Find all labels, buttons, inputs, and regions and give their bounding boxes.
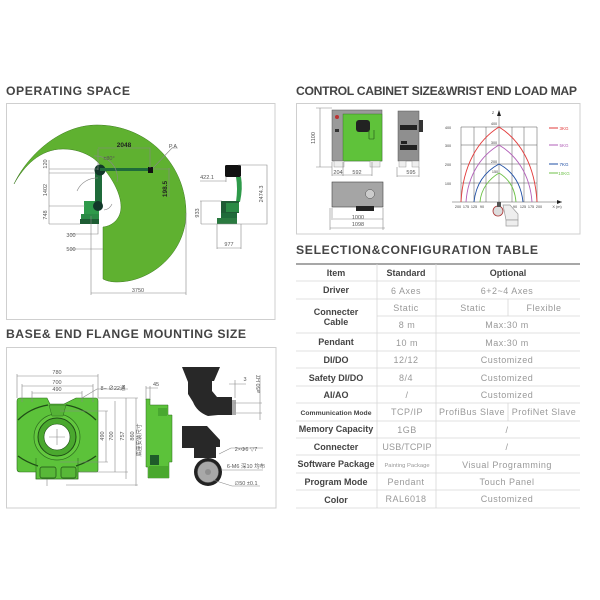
table header: Item <box>327 268 345 278</box>
row: pendant: Max:30 m <box>485 338 529 348</box>
chart axis labels: 150 <box>492 170 498 174</box>
row: program mode <box>304 477 535 487</box>
row: color: RAL6018 <box>385 494 427 504</box>
dimension lines: front view: 977 <box>224 242 234 248</box>
dimension lines: side view: 748 <box>43 210 49 220</box>
icon: wrist side view: 3 <box>243 377 247 383</box>
dimension lines: side view: 300 <box>66 233 76 239</box>
chart axis labels: 90 <box>480 205 484 209</box>
table: selection and configuration <box>296 264 580 508</box>
row: driver <box>323 285 533 296</box>
row: memory capacity: Memory Capacity <box>299 424 373 434</box>
chart axis labels: X (m) <box>552 205 562 209</box>
row: color: Customized <box>481 494 533 504</box>
chart axis labels: 125 <box>471 205 477 209</box>
row: connecter cable <box>314 303 562 330</box>
panel: operating space <box>6 104 275 320</box>
row: di/do: Customized <box>481 355 533 365</box>
icon: wrist front view: ∅50 ±0.1 <box>234 480 258 487</box>
row: software package <box>297 459 552 470</box>
heading: operating space: OPERATING SPACE <box>6 84 130 98</box>
row: program mode: Pendant <box>387 477 425 487</box>
row: pendant: 10 m <box>396 338 418 348</box>
row: connecter cable: Cable <box>324 317 348 327</box>
table header: Standard <box>386 268 426 278</box>
icon: cabinet front view: 592 <box>352 170 362 176</box>
row: communication mode: ProfiNet Slave <box>512 407 576 417</box>
icon: cabinet front view <box>311 108 382 176</box>
dimension lines: front view: 2474.3 <box>259 186 265 202</box>
row: connecter: Connecter <box>314 442 359 452</box>
chart axis labels: 175 <box>463 205 469 209</box>
icon: wrist front view: 6-M6 深10 均布 <box>227 462 266 470</box>
dimension lines: base plate: 700 <box>109 431 115 441</box>
row: ai/ao: / <box>405 390 409 400</box>
dimension lines: side view: 120 <box>43 159 49 169</box>
chart axis labels: 90 <box>513 205 517 209</box>
dimension lines: base plate: 490 <box>100 431 106 441</box>
row: connecter cable: Max:30 m <box>485 320 529 330</box>
row: ai/ao <box>323 390 533 400</box>
chart axis labels <box>445 111 562 209</box>
row: connecter: / <box>505 442 509 452</box>
row: ai/ao: AI/AO <box>323 390 349 400</box>
row: communication mode <box>300 407 576 417</box>
chart legend: 10KG <box>558 171 570 176</box>
row: memory capacity: 1GB <box>397 425 417 435</box>
dimension lines: side view: 1402 <box>43 184 49 196</box>
row: software package: Visual Programming <box>462 460 552 470</box>
chart axis labels: 400 <box>491 122 497 126</box>
panel: base and end flange <box>6 348 276 508</box>
chart legend <box>549 126 570 176</box>
row: connecter cable: 8 m <box>399 320 415 330</box>
dimension lines: side view: 198.5 <box>162 180 169 197</box>
panel: cabinet and load map <box>296 104 580 234</box>
heading: control cabinet: CONTROL CABINET SIZE&WRIST END LOAD MAP <box>296 84 577 98</box>
icon: robot side view <box>80 164 153 224</box>
row: safety di/do: Safety DI/DO <box>309 373 363 383</box>
row: safety di/do: 8/4 <box>399 373 413 383</box>
chart axis labels: 100 <box>445 182 451 186</box>
dimension lines: side view: 3750 <box>132 288 144 294</box>
dimension lines: base plate: 底座安装尺寸 <box>135 423 143 457</box>
icon: cabinet top view <box>330 182 385 230</box>
table grid <box>296 264 580 508</box>
row: connecter cable: Connecter <box>314 307 359 317</box>
icon: wrist side view <box>182 367 262 420</box>
row: di/do <box>323 355 533 365</box>
dimension lines: base plate: 780 <box>52 370 62 376</box>
icon: cabinet side view: 595 <box>406 170 416 176</box>
table header <box>327 268 526 278</box>
dimension lines: front view <box>195 165 267 249</box>
row: program mode: Program Mode <box>304 477 368 487</box>
heading: selection table: SELECTION&CONFIGURATION TABLE <box>296 243 538 257</box>
icon: cabinet top view: 1000 <box>352 215 364 221</box>
row: pendant <box>318 337 529 348</box>
row: ai/ao: Customized <box>481 390 533 400</box>
row: di/do: DI/DO <box>323 355 349 365</box>
dimension lines: side view: ±80° <box>103 156 115 162</box>
dimension lines: base plate: 8− ∅22通 <box>101 384 126 392</box>
chart legend: 7KG <box>559 162 569 167</box>
row: color <box>324 494 533 505</box>
row: communication mode: ProfiBus Slave <box>439 407 505 417</box>
chart axis labels: Z <box>492 111 495 115</box>
row: driver: Driver <box>323 285 350 295</box>
dimension lines: front view: 422.1 <box>200 175 214 181</box>
row: connecter: USB/TCPIP <box>382 442 432 452</box>
dimension lines: side view: 2048 <box>117 142 132 149</box>
icon: wrist front view <box>182 426 266 487</box>
chart axis labels: 200 <box>536 205 542 209</box>
row: communication mode: Communication Mode <box>300 410 372 417</box>
table header: Optional <box>490 268 526 278</box>
row: di/do: 12/12 <box>393 355 419 365</box>
icon: robot front view <box>217 165 242 224</box>
row: color: Color <box>324 495 348 505</box>
chart axis labels: 175 <box>528 205 534 209</box>
chart axis labels: 125 <box>520 205 526 209</box>
icon: wrist front view: 2×Φ6 ▽7 <box>235 447 257 453</box>
icon: cabinet front view: 1100 <box>311 132 317 144</box>
row: driver: 6 Axes <box>391 286 421 296</box>
row: memory capacity <box>299 424 509 435</box>
dimension lines: base plate: 860 <box>130 431 136 441</box>
icon: cabinet front view: 204 <box>333 170 343 176</box>
icon: green base plate <box>17 398 98 479</box>
dimension lines: side view <box>43 142 186 295</box>
chart axis labels: 400 <box>445 126 451 130</box>
chart legend: 5KG <box>559 143 569 148</box>
icon: cabinet side view <box>397 111 423 177</box>
row: memory capacity: / <box>505 425 509 435</box>
chart axis labels: 200 <box>445 163 451 167</box>
row: connecter <box>314 442 509 452</box>
dimension lines: base plate: 757 <box>120 431 126 441</box>
chart axis labels: 300 <box>445 144 451 148</box>
row: driver: 6+2~4 Axes <box>481 286 533 296</box>
chart: green work envelope <box>14 125 186 282</box>
chart axis labels: 300 <box>491 141 497 145</box>
row: connecter cable: Flexible <box>526 303 562 313</box>
load curves <box>461 127 537 202</box>
row: safety di/do: Customized <box>481 373 533 383</box>
dimension lines: side view: P.A <box>169 144 177 150</box>
chart axis labels: 200 <box>455 205 461 209</box>
chart axis labels: 200 <box>491 160 497 164</box>
icon: wrist under chart <box>493 202 518 226</box>
dimension lines: side view: 500 <box>66 247 76 253</box>
row: communication mode: TCP/IP <box>391 407 423 417</box>
chart legend: 3KG <box>559 126 569 131</box>
chart grid <box>452 110 562 204</box>
icon: green base side view <box>146 386 172 478</box>
icon: cabinet top view: 1098 <box>352 222 364 228</box>
icon: wrist side view: ⌀50 H7 <box>256 375 262 393</box>
dimension lines: base plate <box>17 370 159 486</box>
row: safety di/do <box>309 373 533 383</box>
row: software package: Software Package <box>297 459 375 469</box>
row: software package: Painting Package <box>384 463 430 469</box>
dimension lines: base plate: 490 <box>52 387 62 393</box>
row: pendant: Pendant <box>318 337 354 347</box>
dimension lines: base plate: 45 <box>153 382 159 388</box>
heading: base and end flange: BASE& END FLANGE MOUNTING SIZE <box>6 327 246 341</box>
row: program mode: Touch Panel <box>479 477 535 487</box>
dimension lines: base plate: 700 <box>52 380 62 386</box>
row: connecter cable: Static <box>393 303 419 313</box>
dimension lines: front view: 933 <box>195 208 201 218</box>
chart: wrist end load map <box>445 110 570 226</box>
row: connecter cable: Static <box>460 303 486 313</box>
